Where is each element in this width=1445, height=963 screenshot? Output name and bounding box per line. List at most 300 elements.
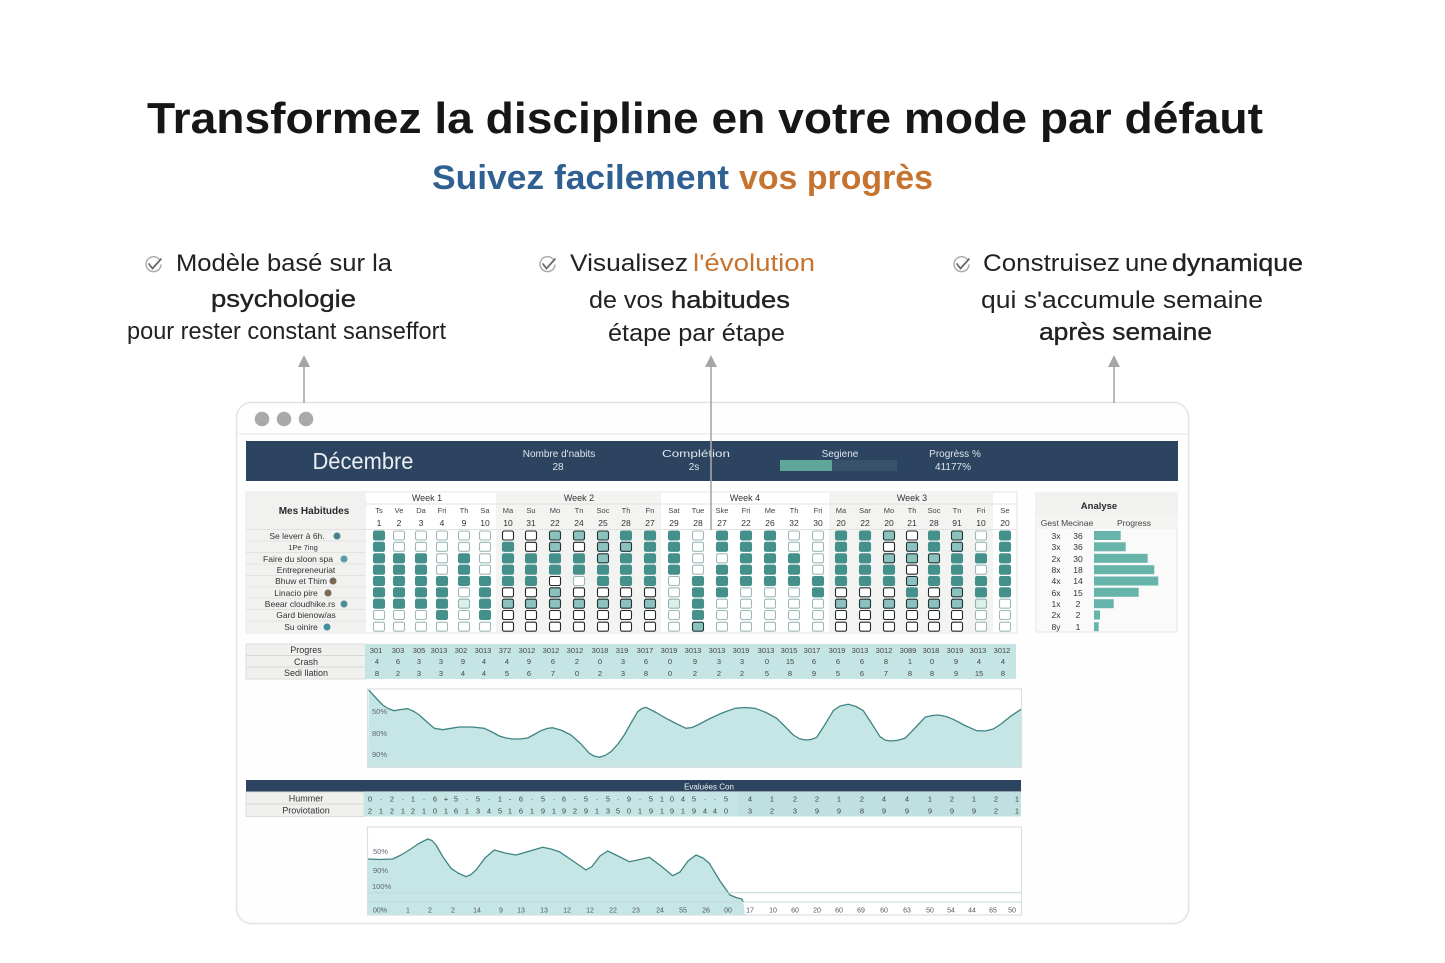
summary table: 3012 (519, 646, 535, 655)
summary table: 3018 (592, 646, 608, 655)
analysis panel: 8x (1052, 565, 1061, 575)
evaluation table: 5 (454, 794, 458, 804)
summary table: 3019 (947, 646, 963, 655)
evaluation table: 1 (498, 794, 502, 804)
habit labels: Se leverr à 6h. (269, 531, 325, 541)
summary table: 3 (740, 657, 744, 666)
summary table: 15 (786, 657, 794, 666)
evaluation table: 4 (713, 806, 717, 816)
evaluation table: 2 (368, 806, 372, 816)
area chart: evaluation: 69 (857, 908, 865, 914)
day numbers: 2 (397, 518, 402, 528)
summary table: 2 (717, 669, 721, 678)
evaluation table: 2 (390, 794, 394, 804)
area chart: evaluation: 13 (540, 908, 548, 914)
day numbers: 27 (645, 518, 655, 528)
summary table: 2 (693, 669, 697, 678)
evaluation table: + (444, 794, 449, 804)
evaluation table: 0 (627, 806, 631, 816)
summary table: 3017 (637, 646, 653, 655)
evaluation table: 9 (837, 806, 841, 816)
summary table: 9 (954, 669, 958, 678)
habit labels: Su oinire (284, 622, 318, 632)
icon: check (146, 257, 161, 272)
day numbers: 10 (480, 518, 490, 528)
summary table: 4 (1001, 657, 1005, 666)
summary table: 1 (908, 657, 912, 666)
evaluation table: 2 (950, 794, 954, 804)
dashboard window (236, 402, 1188, 924)
day numbers: 30 (813, 518, 823, 528)
icon: check (540, 257, 555, 272)
evaluation table: 1 (660, 794, 664, 804)
day numbers: 10 (503, 518, 513, 528)
summary table: 3017 (804, 646, 820, 655)
analysis panel: 14 (1073, 576, 1083, 586)
evaluation table: 1 (422, 806, 426, 816)
week labels: Week 4 (730, 493, 760, 503)
summary table: 6 (396, 657, 400, 666)
evaluation table: · (466, 794, 468, 804)
benefit: build momentum: qui s'accumule semaine (981, 287, 1263, 314)
evaluation table: 1 (401, 806, 405, 816)
day labels: Se (1000, 506, 1010, 515)
summary table: 3 (621, 657, 625, 666)
summary table: 8 (1001, 669, 1005, 678)
day labels: Fri (438, 506, 447, 515)
summary table: 6 (527, 669, 531, 678)
summary table: 4 (375, 657, 379, 666)
summary table: 7 (884, 669, 888, 678)
evaluation table: 1 (552, 806, 556, 816)
summary table: 4 (977, 657, 981, 666)
evaluation table: 4 (748, 794, 752, 804)
area chart: evaluation: 13 (517, 908, 525, 914)
benefit: build momentum: après semaine (1039, 319, 1212, 346)
habit labels: 1Pe 7ing (288, 543, 318, 552)
summary table: 3015 (781, 646, 797, 655)
evaluation table: · (488, 794, 490, 804)
area chart: evaluation: 20 (813, 908, 821, 914)
evaluation table: 5 (616, 806, 620, 816)
summary table: 6 (644, 657, 648, 666)
progress bars (1094, 531, 1158, 631)
summary table: 305 (413, 646, 425, 655)
summary table: 9 (812, 669, 816, 678)
day numbers: 31 (526, 518, 536, 528)
week labels: Week 2 (564, 493, 594, 503)
week labels: Week 1 (412, 493, 442, 503)
evaluation table: 9 (950, 806, 954, 816)
evaluation table: · (617, 794, 619, 804)
summary table: 8 (930, 669, 934, 678)
summary table: 8 (788, 669, 792, 678)
evaluation table: 2 (793, 794, 797, 804)
summary table: 3 (417, 657, 421, 666)
day numbers: 22 (860, 518, 870, 528)
evaluation table: · (639, 794, 641, 804)
evaluation table: 9 (905, 806, 909, 816)
summary table: 6 (836, 657, 840, 666)
area chart: evaluation: 1 (406, 908, 410, 914)
evaluation table: 1 (681, 806, 685, 816)
habit labels: Beear cloudhike.rs (265, 599, 335, 609)
evaluation table: 5 (584, 794, 588, 804)
area chart: progress: 90% (372, 750, 387, 759)
analysis panel: 3x (1052, 531, 1061, 541)
summary table: 0 (765, 657, 769, 666)
benefit: psychology model: psychologie (211, 286, 356, 313)
evaluation table: · (574, 794, 576, 804)
evaluation table: 2 (390, 806, 394, 816)
summary table: 3 (439, 669, 443, 678)
day labels: Th (908, 506, 916, 515)
analysis panel: 18 (1073, 565, 1083, 575)
summary table: 303 (392, 646, 404, 655)
evaluation table: 9 (541, 806, 545, 816)
analysis panel: 15 (1073, 588, 1083, 598)
day labels: Th (622, 506, 630, 515)
area chart: evaluation: 14 (473, 908, 481, 914)
evaluation table: 9 (649, 806, 653, 816)
summary table: 0 (930, 657, 934, 666)
subtitle (432, 159, 933, 197)
summary table: 9 (461, 657, 465, 666)
header band: Décembre (312, 448, 414, 474)
evaluation table: 2 (770, 806, 774, 816)
evaluation table: 1 (638, 806, 642, 816)
day labels: Sa (480, 506, 490, 515)
analysis panel: 8y (1052, 622, 1061, 632)
evaluation table: 9 (670, 806, 674, 816)
area chart: evaluation: 54 (947, 908, 955, 914)
evaluation table: 3 (748, 806, 752, 816)
evaluation table: · (402, 794, 404, 804)
day numbers: 3 (419, 518, 424, 528)
evaluation table: Proviotation (282, 806, 330, 816)
evaluation table: 1 (508, 806, 512, 816)
summary table: 3089 (900, 646, 916, 655)
benefit: visualize evolution (540, 250, 815, 347)
evaluation table: 6 (519, 794, 523, 804)
area chart: evaluation: 26 (702, 908, 710, 914)
summary table: 9 (954, 657, 958, 666)
evaluation table: 4 (703, 806, 707, 816)
summary table: 8 (884, 657, 888, 666)
summary table: 2 (396, 669, 400, 678)
title: Transformez la discipline en votre mode par défaut (147, 94, 1263, 143)
day labels: Soc (928, 506, 941, 515)
summary table: 8 (644, 669, 648, 678)
area chart: evaluation: 55 (679, 908, 687, 914)
summary table: 3012 (876, 646, 892, 655)
area chart: progress (368, 689, 1022, 768)
evaluation table: 5 (541, 794, 545, 804)
header band: Segiene (822, 449, 859, 460)
evaluation table: · (704, 794, 706, 804)
day labels: Ma (836, 506, 847, 515)
summary table: 319 (616, 646, 628, 655)
checkbox grid (374, 531, 1010, 631)
week labels (412, 493, 927, 503)
area chart: evaluation: 17 (746, 908, 754, 914)
area chart: evaluation: 22 (609, 908, 617, 914)
arrow: middle (705, 355, 717, 530)
summary table: 301 (370, 646, 382, 655)
benefit: build momentum: Construisez (983, 250, 1120, 277)
evaluation table: 2 (994, 806, 998, 816)
header band (246, 441, 1178, 481)
window dots (255, 412, 313, 426)
analysis panel: 1 (1076, 622, 1081, 632)
evaluation table: 1 (530, 806, 534, 816)
habit icons (324, 532, 348, 630)
habit labels: Bhuw et Thim (275, 576, 327, 586)
summary table: 6 (812, 657, 816, 666)
summary table: 8 (908, 669, 912, 678)
summary table: 372 (499, 646, 511, 655)
day numbers: 27 (717, 518, 727, 528)
benefit: psychology model: pour rester constant sanseffort (127, 318, 446, 345)
analysis panel: 36 (1073, 531, 1083, 541)
area chart: evaluation: 23 (632, 908, 640, 914)
area chart: evaluation: 00 (724, 908, 732, 914)
benefit: build momentum: dynamique (1172, 250, 1303, 277)
evaluation table: 2 (573, 806, 577, 816)
evaluation table: 9 (972, 806, 976, 816)
summary table: 5 (836, 669, 840, 678)
evaluation table: 5 (476, 794, 480, 804)
day numbers: 22 (550, 518, 560, 528)
analysis panel: 2 (1076, 610, 1081, 620)
evaluation table: 5 (649, 794, 653, 804)
day numbers: 28 (693, 518, 703, 528)
day labels: Sat (668, 506, 681, 515)
evaluation table: · (714, 794, 716, 804)
evaluation table: 1 (595, 806, 599, 816)
week labels: Week 3 (897, 493, 927, 503)
benefit: visualize evolution: Visualisez (570, 250, 688, 277)
header band: Nombre d'nabits (523, 449, 595, 460)
evaluation table: 5 (606, 794, 610, 804)
evaluation table: 9 (692, 806, 696, 816)
area chart: evaluation: 12 (563, 908, 571, 914)
day numbers: 32 (789, 518, 799, 528)
evaluation table: 0 (433, 806, 437, 816)
evaluation table: 0 (724, 806, 728, 816)
summary table: 4 (461, 669, 465, 678)
analysis panel (1036, 493, 1177, 632)
evaluation table: 4 (905, 794, 909, 804)
summary table: 2 (575, 657, 579, 666)
analysis panel: 2 (1076, 599, 1081, 609)
analysis panel: Analyse (1081, 501, 1117, 512)
evaluation table: 1 (770, 794, 774, 804)
evaluation table: 1 (465, 806, 469, 816)
area chart: evaluation: 24 (656, 908, 664, 914)
day labels: Fri (742, 506, 751, 515)
day labels: Th (460, 506, 468, 515)
day labels: Ve (395, 506, 403, 515)
summary table: 0 (668, 669, 672, 678)
habit labels: Gard bienow/as (276, 610, 336, 620)
summary table: Progres (290, 645, 322, 655)
evaluation table (246, 780, 1021, 816)
header band: 41177% (935, 462, 971, 473)
habit labels (263, 531, 336, 632)
area chart: evaluation: 50 (1008, 908, 1016, 914)
area chart: evaluation: 65 (989, 908, 997, 914)
day numbers: 22 (741, 518, 751, 528)
analysis panel: 30 (1073, 554, 1083, 564)
area chart: evaluation: 100% (372, 882, 392, 891)
day labels: Fn (646, 506, 654, 515)
evaluation table: 9 (928, 806, 932, 816)
subtitle: vos progrès (739, 159, 933, 197)
benefit: psychology model (127, 250, 446, 345)
summary table: 3018 (923, 646, 939, 655)
summary table: 3012 (543, 646, 559, 655)
day labels: Ma (503, 506, 514, 515)
evaluation table: 2 (815, 794, 819, 804)
area chart: evaluation: 50 (926, 908, 934, 914)
benefit: build momentum: une (1125, 250, 1168, 277)
evaluation table: 1 (972, 794, 976, 804)
evaluation table: · (531, 794, 533, 804)
analysis panel: Progress (1117, 518, 1151, 528)
summary table: 4 (482, 657, 486, 666)
area chart: evaluation: 2 (451, 908, 455, 914)
day numbers: 29 (669, 518, 679, 528)
summary table: 3019 (733, 646, 749, 655)
analysis panel: 1x (1052, 599, 1061, 609)
area chart: evaluation: 44 (968, 908, 976, 914)
area chart: evaluation: 60 (791, 908, 799, 914)
habit labels: Entrepreneuriat (277, 565, 336, 575)
evaluation table: 3 (793, 806, 797, 816)
day labels: Ske (716, 506, 728, 515)
evaluation table: 9 (584, 806, 588, 816)
day labels: Su (526, 506, 536, 515)
evaluation table: 5 (692, 794, 696, 804)
analysis panel: Gest Mecinae (1041, 518, 1093, 528)
area chart: evaluation: 50% (373, 847, 388, 856)
day labels: Tn (953, 506, 961, 515)
evaluation table: · (423, 794, 425, 804)
evaluation table: · (553, 794, 555, 804)
summary table (246, 644, 1016, 679)
summary table: 4 (505, 657, 509, 666)
day numbers: 1 (377, 518, 382, 528)
evaluation table: 6 (519, 806, 523, 816)
day numbers: 20 (884, 518, 894, 528)
summary table: 8 (375, 669, 379, 678)
evaluation table: 5 (498, 806, 502, 816)
summary table: Sedi llation (284, 668, 328, 678)
day labels: Tn (575, 506, 583, 515)
area chart: evaluation: 60 (835, 908, 843, 914)
day labels: Mo (884, 506, 894, 515)
summary table: 3013 (475, 646, 491, 655)
evaluation table: Hummer (289, 794, 323, 804)
summary table: 0 (598, 657, 602, 666)
evaluation table: 4 (882, 794, 886, 804)
header band: 2s (689, 462, 699, 473)
evaluation table: 9 (562, 806, 566, 816)
day numbers: 91 (952, 518, 962, 528)
summary table: 9 (527, 657, 531, 666)
evaluation table: 1 (1015, 794, 1019, 804)
summary table: Crash (294, 657, 318, 667)
day labels: Ts (375, 506, 383, 515)
day numbers: 21 (907, 518, 917, 528)
icon: check (954, 257, 969, 272)
summary table: 3013 (709, 646, 725, 655)
summary table: 3012 (567, 646, 583, 655)
summary table: 3 (621, 669, 625, 678)
summary table: 3013 (431, 646, 447, 655)
evaluation table: 6 (433, 794, 437, 804)
summary table: 15 (975, 669, 983, 678)
day labels: Soc (597, 506, 610, 515)
summary table: 302 (455, 646, 467, 655)
summary table: 3019 (829, 646, 845, 655)
summary table: 3 (417, 669, 421, 678)
summary table: 3019 (661, 646, 677, 655)
arrow: left (298, 355, 310, 403)
day numbers: 20 (1000, 518, 1010, 528)
area chart: evaluation: 9 (499, 908, 503, 914)
summary table: 3013 (758, 646, 774, 655)
evaluation table: 4 (487, 806, 491, 816)
summary table: 3 (717, 657, 721, 666)
summary table: 6 (860, 657, 864, 666)
evaluation table: 2 (411, 806, 415, 816)
evaluation table: 6 (454, 806, 458, 816)
summary table: 6 (860, 669, 864, 678)
evaluation table: 9 (882, 806, 886, 816)
evaluation table: 1 (411, 794, 415, 804)
day labels: Tue (692, 506, 704, 515)
evaluation table: 3 (606, 806, 610, 816)
day numbers: 24 (574, 518, 584, 528)
evaluation table: - (509, 794, 512, 804)
day numbers: 10 (976, 518, 986, 528)
benefit: build momentum (954, 250, 1303, 346)
area chart: evaluation: 2 (428, 908, 432, 914)
evaluation table: 1 (660, 806, 664, 816)
area chart: evaluation: 60 (880, 908, 888, 914)
summary table: 2 (740, 669, 744, 678)
day labels: Da (416, 506, 427, 515)
summary table: 6 (551, 657, 555, 666)
habit labels: Linacio pire (274, 588, 318, 598)
evaluation table: 6 (562, 794, 566, 804)
habit labels: Faire du sloon spa (263, 554, 333, 564)
summary table: 3013 (685, 646, 701, 655)
habit table (246, 492, 1017, 633)
evaluation table: 1 (1015, 806, 1019, 816)
area chart: evaluation: 10 (769, 908, 777, 914)
area chart: evaluation: 90% (373, 866, 388, 875)
benefit: psychology model: Modèle basé sur la (176, 250, 392, 277)
evaluation table: 1 (379, 806, 383, 816)
evaluation table: Evaluées Con (684, 782, 734, 792)
area chart: evaluation: 00% (373, 908, 387, 914)
day labels: Fri (977, 506, 986, 515)
evaluation table: 9 (627, 794, 631, 804)
summary table: 3 (439, 657, 443, 666)
